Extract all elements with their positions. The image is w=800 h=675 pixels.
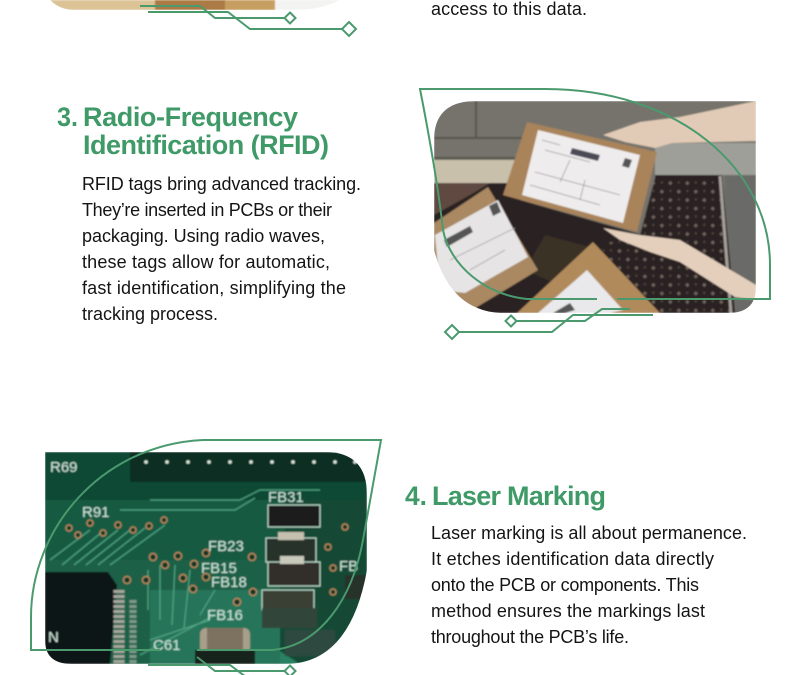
heading: section 3: Identification (RFID) bbox=[83, 130, 329, 160]
photo: green circuit board bbox=[45, 452, 367, 664]
text block: RFID description: packaging. Using radio waves, bbox=[82, 226, 325, 246]
photo: green circuit board: N bbox=[48, 629, 59, 646]
text block: laser marking description: onto the PCB or components. This bbox=[431, 575, 699, 595]
photo: green circuit board: R91 bbox=[82, 504, 110, 521]
photo: hands holding parcels on a rug bbox=[434, 101, 756, 313]
photo: green circuit board: FB18 bbox=[211, 574, 247, 591]
heading: section 3 bbox=[57, 102, 329, 160]
circuit trace: photo 3 bbox=[445, 309, 653, 339]
photo: green circuit board: C61 bbox=[153, 637, 181, 654]
circuit trace: top section bbox=[140, 6, 356, 36]
text block: RFID description: RFID tags bring advanced tracking. bbox=[82, 174, 361, 194]
text block: laser marking description bbox=[431, 523, 747, 647]
photo: green circuit board: FB bbox=[339, 558, 358, 575]
photo: green circuit board: FB31 bbox=[268, 489, 304, 506]
heading: section 4: 4. bbox=[405, 481, 427, 511]
leaf outline: photo 4 frame bbox=[31, 440, 381, 650]
text block: laser marking description: throughout the PCB’s life. bbox=[431, 627, 629, 647]
heading: section 3: Radio-Frequency bbox=[83, 102, 298, 132]
heading: section 3: 3. bbox=[57, 102, 78, 132]
text block: laser marking description: It etches identification data directly bbox=[431, 549, 714, 569]
text block: RFID description bbox=[82, 174, 361, 324]
photo: green circuit board: FB23 bbox=[208, 538, 244, 555]
text block: RFID description: tracking process. bbox=[82, 304, 218, 324]
photo: top section cropped wood image bbox=[50, 0, 340, 10]
photo: green circuit board: FB16 bbox=[207, 607, 243, 624]
text block: RFID description: these tags allow for automatic, bbox=[82, 252, 330, 272]
text block: laser marking description: method ensures the markings last bbox=[431, 601, 705, 621]
leaf outline: photo 3 frame bbox=[420, 89, 770, 299]
heading: section 4: Laser Marking bbox=[432, 481, 606, 511]
photo: green circuit board: R69 bbox=[50, 459, 78, 476]
text block: RFID description: They’re inserted in PCBs or their bbox=[82, 200, 332, 220]
photo: green circuit board: FB15 bbox=[201, 560, 237, 577]
circuit trace: photo 4 bbox=[148, 657, 296, 675]
text block: laser marking description: Laser marking is all about permanence. bbox=[431, 523, 747, 543]
text block: RFID description: fast identification, simplifying the bbox=[82, 278, 346, 298]
